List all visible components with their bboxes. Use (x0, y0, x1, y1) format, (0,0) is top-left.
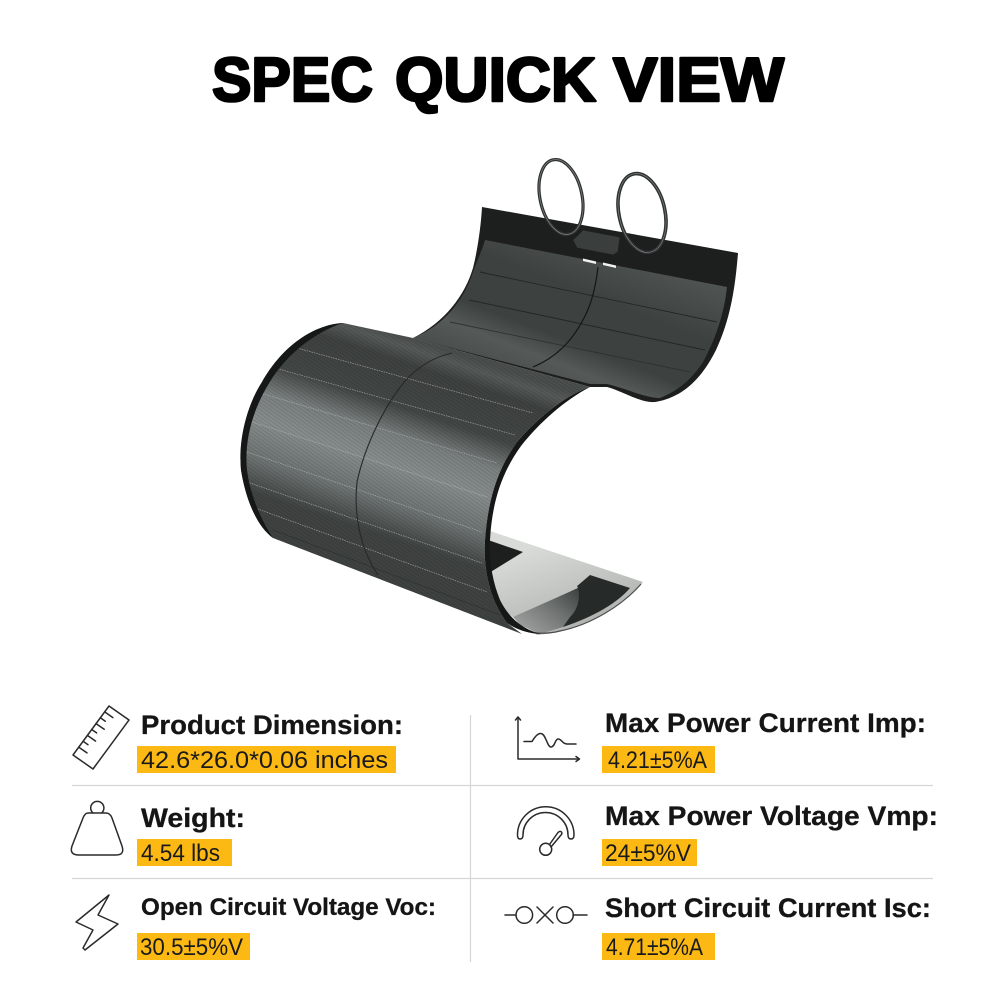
value highlight (602, 933, 715, 960)
title: SPEC (212, 46, 373, 115)
icon: ruler (73, 706, 129, 769)
label: Short Circuit Current Isc: (605, 893, 931, 923)
spec: open circuit voltage (76, 894, 436, 961)
white connector tabs (583, 258, 616, 268)
spec: max power current (516, 708, 926, 774)
value: 42.6*26.0*0.06 inches (141, 747, 388, 774)
label: Open Circuit Voltage Voc: (141, 894, 436, 921)
product image: flexible solar panel (240, 155, 738, 635)
title (212, 46, 785, 115)
title: VIEW (613, 46, 785, 115)
bottom tray underside (490, 531, 643, 635)
spec: max power voltage (518, 801, 938, 867)
film curl (513, 588, 579, 634)
front roll cell lines (247, 348, 533, 615)
front roll (240, 323, 590, 634)
spec: weight (71, 801, 245, 867)
value highlight (137, 746, 396, 773)
cable ring: right (611, 169, 673, 257)
value: 4.71±5%A (606, 934, 703, 961)
value highlight (602, 746, 715, 773)
icon: weight (71, 801, 123, 855)
front roll black right edge (485, 387, 590, 634)
front roll texture (240, 323, 590, 634)
value: 4.54 lbs (141, 840, 220, 867)
upper panel cell lines and seam (450, 267, 717, 372)
title: QUICK (395, 46, 596, 115)
label: Max Power Current Imp: (605, 708, 926, 738)
front roll black left edge (240, 323, 343, 538)
divider lines (72, 715, 933, 962)
value: 4.21±5%A (608, 747, 707, 774)
icon: lightning bolt (76, 895, 118, 950)
value highlight (137, 839, 232, 866)
icon: gauge (518, 807, 574, 855)
upper panel backing (413, 207, 738, 402)
icon: circuit symbol (505, 907, 587, 923)
label: Product Dimension: (141, 710, 403, 740)
dark fragment behind film (488, 540, 523, 573)
front roll seam (356, 353, 452, 575)
upper panel active cells (413, 240, 727, 398)
tray curved rim (510, 584, 641, 633)
peeled protective film (492, 557, 578, 617)
junction box (573, 230, 620, 255)
value highlight (602, 839, 697, 866)
spec: short circuit current (505, 893, 931, 961)
value highlight (137, 933, 250, 960)
label: Max Power Voltage Vmp: (605, 801, 938, 831)
cable ring: left (533, 155, 589, 239)
value: 24±5%V (605, 840, 691, 867)
label: Weight: (141, 803, 245, 833)
value: 30.5±5%V (140, 934, 243, 961)
spec: product dimension (73, 706, 403, 774)
dark inner sheet (555, 575, 630, 627)
icon: line chart (516, 717, 580, 762)
